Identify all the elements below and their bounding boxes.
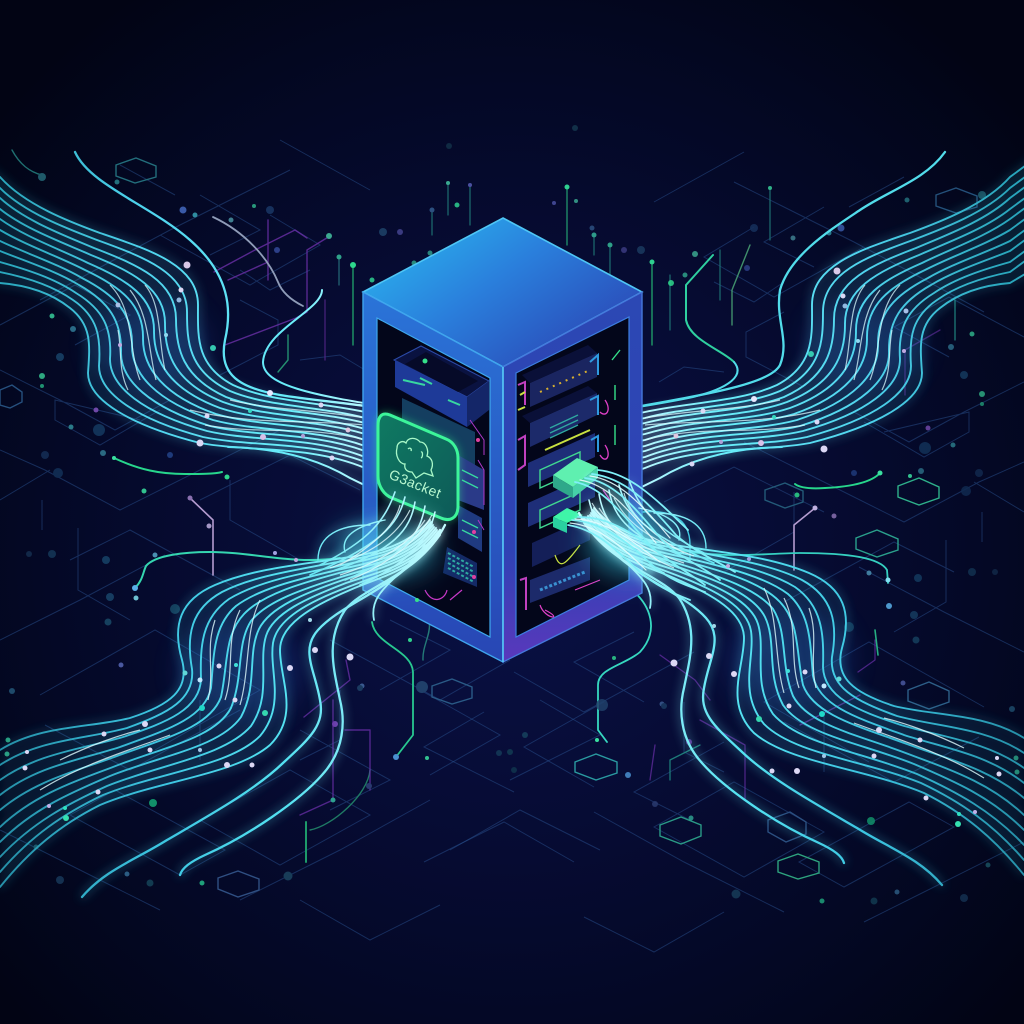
data flow: upper right wires (615, 155, 1024, 500)
lower left wire glow (0, 492, 445, 897)
mirrored circuit grid (424, 152, 1024, 952)
purple and green circuit traces (12, 150, 955, 862)
badge glow (378, 414, 458, 520)
left opening (377, 318, 490, 637)
server rack cabinet (363, 218, 642, 662)
upper left highlights (110, 285, 365, 440)
junction glow near the rack base (335, 506, 672, 576)
lower connector (553, 508, 583, 533)
outer wires: upper right (620, 152, 945, 410)
icon: cloud creature outline (396, 438, 433, 478)
glowing badge (378, 414, 458, 520)
lower left highlights (40, 505, 432, 790)
small background nodes (4, 125, 890, 886)
network connectors (553, 458, 598, 533)
data flow: lower right wires (579, 480, 1024, 885)
left side server units (394, 346, 489, 602)
data flow: lower left wires (0, 492, 445, 897)
connector cable bundles (568, 470, 735, 600)
upper connector (553, 458, 598, 498)
front edge highlight (502, 367, 504, 662)
cable glow (578, 478, 660, 570)
badge body (378, 414, 458, 520)
soft glow behind the flows (95, 300, 920, 720)
badge label: G3acket (387, 466, 444, 501)
upper left wire glow (0, 155, 395, 500)
data flow: upper left wires (0, 155, 395, 500)
right side server units (518, 345, 620, 617)
rack right face (503, 292, 642, 662)
hexagon outlines (0, 158, 977, 897)
rack top face (363, 218, 642, 367)
mirrored background nodes (134, 143, 1020, 904)
mirrored bright nodes (670, 268, 1002, 827)
outer wires: upper left (75, 152, 395, 410)
circuit grid (0, 140, 600, 940)
rack left face (363, 292, 503, 662)
right opening (516, 317, 629, 637)
bright flow nodes (22, 262, 354, 821)
